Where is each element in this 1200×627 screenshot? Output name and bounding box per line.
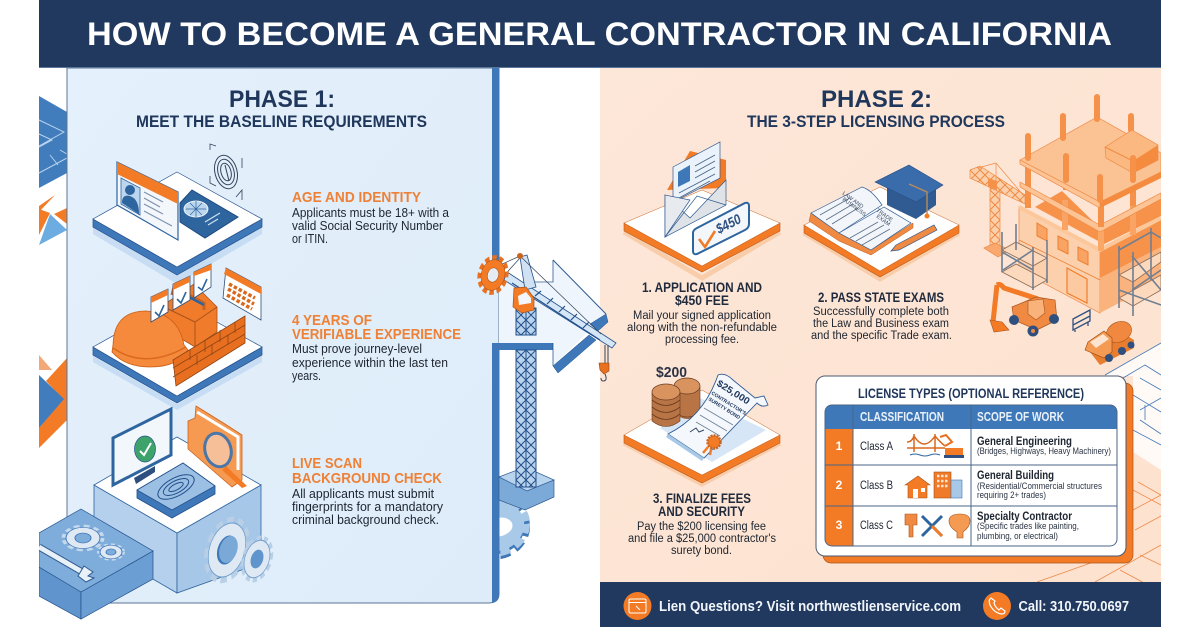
table header: SCOPE OF WORK [977, 410, 1064, 424]
text block: age and identity: AGE AND IDENTITY [292, 189, 421, 206]
heading: phase 1: MEET THE BASELINE REQUIREMENTS [136, 113, 427, 131]
row 1: class A [860, 434, 1111, 458]
panel: phase 2 background [600, 68, 1161, 582]
text block: verifiable experience: years. [292, 369, 321, 383]
contact: phone: Call: 310.750.0697 [1018, 599, 1129, 615]
icon: crane jib, gear and hook [479, 253, 616, 381]
table header: CLASSIFICATION [860, 410, 944, 424]
title banner: HOW TO BECOME A GENERAL CONTRACTOR IN CALIFORNIA [87, 16, 1112, 52]
heading: phase 1 [136, 86, 427, 131]
text block: live scan background check: All applicants must submit [292, 487, 435, 501]
text block: age and identity [292, 189, 449, 246]
icon: coins and surety bond: $25,000 [714, 378, 752, 407]
row 2: class B: requiring 2+ trades) [977, 490, 1046, 500]
panel: license types table [816, 376, 1133, 563]
text block: step 3 fees: AND SECURITY [658, 504, 745, 519]
icon: exam book, grad cap and pencil [804, 165, 959, 279]
text block: live scan background check: LIVE SCAN [292, 455, 362, 472]
table number column: 1 [836, 439, 843, 453]
row 3: class C: Specialty Contractor [977, 511, 1072, 523]
icon: website [624, 592, 652, 620]
row 2: class B: Class B [860, 480, 893, 492]
table title: LICENSE TYPES (OPTIONAL REFERENCE) [858, 386, 1084, 401]
icon: exam book, grad cap and pencil: TRADE [875, 208, 894, 224]
text block: age and identity: or ITIN. [292, 232, 328, 246]
text block: live scan background check: criminal background check. [292, 513, 439, 527]
icon: exam book, grad cap and pencil: BUSINESS [841, 197, 867, 218]
icon: tool block with gears and wrench [39, 509, 153, 619]
row 1: class A: (Bridges, Highways, Heavy Machinery) [977, 446, 1111, 456]
icon: background check pedestal [94, 406, 261, 593]
row 2: class B [860, 470, 1102, 500]
illustration: excavator [990, 284, 1059, 336]
footer bar [600, 582, 1161, 627]
table header [825, 405, 1117, 429]
text block: verifiable experience: VERIFIABLE EXPERIENCE [292, 326, 461, 343]
table number column: 3 [836, 518, 843, 532]
icon: experience platform with hard hat, toolbox and bricks [93, 264, 262, 410]
text block: step 1 application: processing fee. [665, 334, 739, 346]
illustration: scaffolding [1002, 224, 1161, 316]
icon: exam book, grad cap and pencil: LAW AND [841, 191, 864, 210]
heading: phase 1: PHASE 1: [229, 86, 335, 113]
text block: step 1 application: along with the non-refundable [627, 322, 777, 334]
text block: step 2 exams: 2. PASS STATE EXAMS [818, 290, 944, 305]
illustration: building under construction [1019, 94, 1161, 313]
illustration: concrete truck [1085, 317, 1135, 365]
heading: phase 2: PHASE 2: [821, 86, 932, 113]
text block: live scan background check: BACKGROUND CHECK [292, 470, 442, 487]
illustration: blueprint background [1037, 343, 1161, 592]
icon: crane base gear [471, 498, 527, 559]
table number column [825, 429, 853, 546]
illustration: orange tower crane [970, 163, 1025, 257]
text block: step 2 exams [811, 290, 952, 342]
row 3: class C [860, 511, 1079, 541]
panel: phase 1 background [67, 68, 553, 603]
arrow: phase 1 to phase 2 [499, 260, 608, 373]
icon: application envelope with $450 badge [624, 142, 780, 278]
table number column: 2 [836, 478, 843, 492]
row 1: class A: General Engineering [977, 436, 1072, 448]
row 2: class B: General Building [977, 470, 1054, 482]
row 1: class A: Class A [860, 441, 893, 453]
text block: step 3 fees: and file a $25,000 contractor's [628, 533, 776, 545]
icon: coins and surety bond: CONTRACTOR'S [710, 391, 748, 417]
text block: step 3 fees: Pay the $200 licensing fee [637, 521, 766, 533]
text block: live scan background check: fingerprints for a mandatory [292, 500, 444, 514]
text block: step 3 fees: surety bond. [671, 545, 732, 557]
row 3: class C: Class C [860, 520, 893, 532]
icon: identity documents platform [93, 144, 262, 284]
text block: step 2 exams: and the specific Trade exam. [811, 330, 952, 342]
heading: phase 2: THE 3-STEP LICENSING PROCESS [747, 113, 1005, 131]
icon: phone [983, 592, 1011, 620]
text block: age and identity: valid Social Security Number [292, 219, 443, 233]
icon: crane base block [499, 467, 554, 510]
text block: verifiable experience [292, 312, 461, 383]
icon: crane tower [516, 308, 536, 487]
text block: step 2 exams: Successfully complete both [813, 306, 949, 318]
icon: coins and surety bond: SURETY BOND [707, 397, 741, 421]
decorative shapes: left margin [39, 96, 67, 448]
text block: step 1 application: 1. APPLICATION AND [642, 280, 762, 295]
contact: website: Lien Questions? Visit northwestlienservice.com [659, 599, 961, 615]
label: $200 fee: $200 [656, 364, 687, 381]
text block: step 2 exams: the Law and Business exam [813, 318, 949, 330]
icon: coins and surety bond [624, 374, 780, 484]
text block: live scan background check [292, 455, 444, 527]
row 3: class C: plumbing, or electrical) [977, 531, 1058, 541]
icon: gears beside pedestal [206, 513, 271, 587]
text block: step 1 application: $450 FEE [675, 293, 729, 308]
text block: age and identity: Applicants must be 18+ with a [292, 206, 449, 220]
icon: application envelope with $450 badge: $450 [712, 211, 744, 237]
text block: verifiable experience: 4 YEARS OF [292, 312, 372, 329]
heading: phase 2 [747, 86, 1005, 131]
illustration: road barrier [1073, 310, 1090, 332]
title banner [39, 0, 1161, 68]
text block: verifiable experience: Must prove journey-level [292, 342, 422, 356]
row 2: class B: (Residential/Commercial structures [977, 481, 1102, 491]
row 3: class C: (Specific trades like painting, [977, 521, 1079, 531]
text block: step 3 fees: 3. FINALIZE FEES [653, 491, 751, 506]
icon: exam book, grad cap and pencil: EXAM [875, 214, 891, 228]
text block: step 1 application [627, 280, 777, 346]
text block: step 3 fees [628, 491, 776, 557]
text block: verifiable experience: experience within the last ten [292, 356, 448, 370]
text block: step 1 application: Mail your signed application [633, 310, 771, 322]
